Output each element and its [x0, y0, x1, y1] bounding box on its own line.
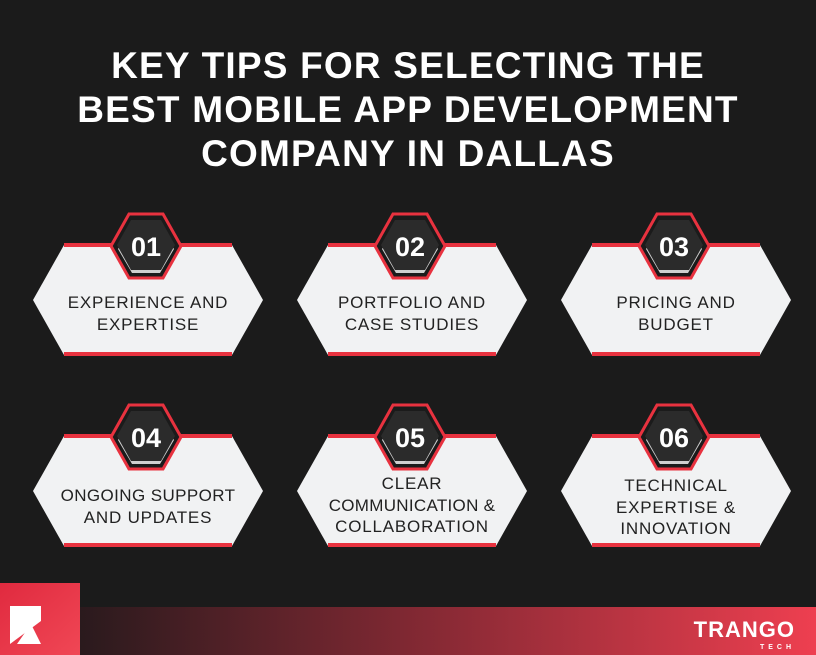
card 05: CLEAR [382, 474, 442, 493]
card 05: COMMUNICATION & [329, 496, 496, 515]
card 05 [297, 405, 527, 547]
title: COMPANY IN DALLAS [201, 133, 615, 174]
title: KEY TIPS FOR SELECTING THE [111, 45, 705, 86]
card 02 [297, 214, 527, 356]
card 06 [561, 405, 791, 547]
card 01: EXPERTISE [97, 315, 199, 334]
card 05: COLLABORATION [335, 517, 489, 536]
card 03: PRICING AND [616, 293, 736, 312]
card 02: 02 [395, 232, 425, 262]
card 04 [33, 405, 263, 547]
card 03: BUDGET [638, 315, 714, 334]
card 03 [561, 214, 791, 356]
card 03: 03 [659, 232, 689, 262]
title [77, 45, 739, 174]
card 06: INNOVATION [620, 519, 732, 538]
card 04: AND UPDATES [84, 508, 212, 527]
logo text: TRANGO [694, 617, 795, 642]
card 01 [33, 214, 263, 356]
logo text: TECH [760, 644, 795, 651]
card 02: CASE STUDIES [345, 315, 479, 334]
footer bar [80, 607, 816, 655]
card 05: 05 [395, 423, 425, 453]
card 01: EXPERIENCE AND [68, 293, 228, 312]
card 01: 01 [131, 232, 161, 262]
card 06: TECHNICAL [624, 476, 728, 495]
logo square icon [0, 583, 80, 655]
card 04: ONGOING SUPPORT [61, 486, 235, 505]
title: BEST MOBILE APP DEVELOPMENT [77, 89, 739, 130]
card 06: 06 [659, 423, 689, 453]
card 04: 04 [131, 423, 161, 453]
card 02: PORTFOLIO AND [338, 293, 486, 312]
card 06: EXPERTISE & [616, 498, 736, 517]
